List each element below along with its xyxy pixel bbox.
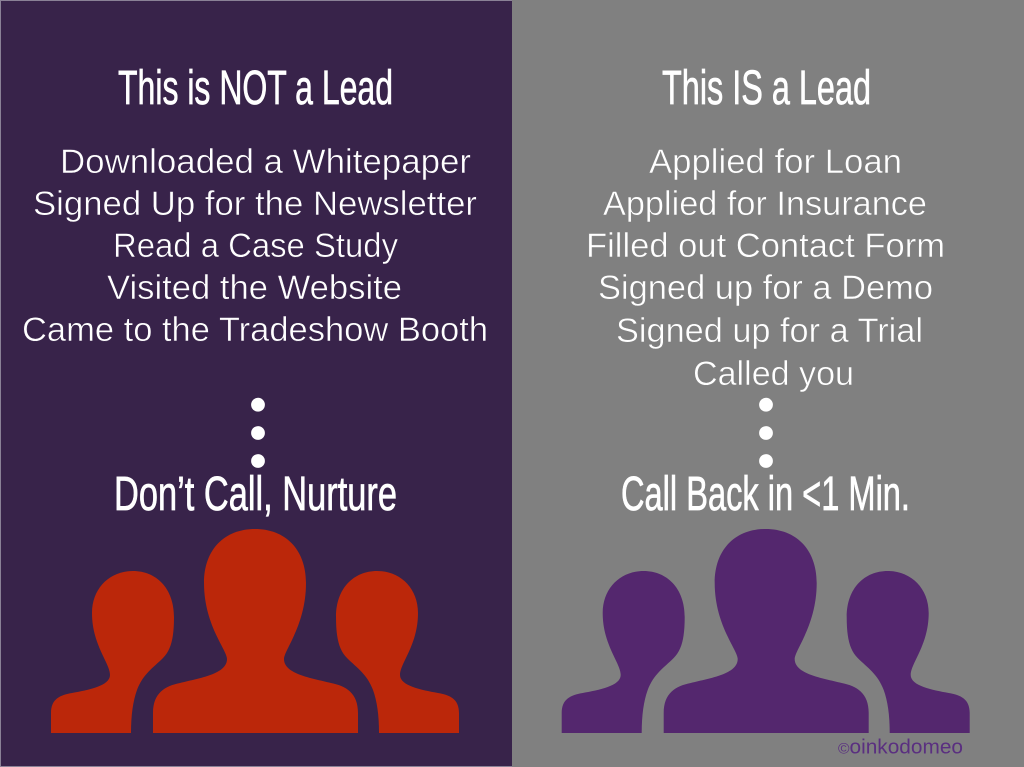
list: lead actions: Signed up for a Trial	[616, 312, 923, 350]
heading: This IS a Lead: This IS a Lead	[662, 62, 871, 115]
icon: orange people group	[51, 529, 459, 733]
list: not a lead actions: Downloaded a Whitepaper	[60, 143, 471, 181]
dots: right connector	[759, 398, 773, 468]
list: lead actions: Filled out Contact Form	[586, 227, 945, 265]
list: lead actions: Applied for Insurance	[603, 185, 927, 223]
list: lead actions	[586, 143, 945, 393]
list: not a lead actions: Visited the Website	[107, 269, 402, 307]
dots: left connector	[251, 398, 265, 468]
list: not a lead actions: Signed Up for the Newsletter	[33, 185, 477, 223]
list: lead actions: Signed up for a Demo	[598, 269, 933, 307]
heading: This is NOT a Lead: This is NOT a Lead	[118, 62, 393, 115]
list: not a lead actions: Came to the Tradeshow Booth	[22, 311, 488, 349]
list: not a lead actions	[22, 143, 488, 349]
icon: purple people group	[562, 529, 970, 733]
credit: oinkodomeo: ©oinkodomeo	[838, 736, 963, 758]
list: not a lead actions: Read a Case Study	[113, 227, 398, 265]
panel: not a lead	[1, 1, 512, 766]
heading: Don't Call, Nurture: Don’t Call, Nurture	[114, 468, 397, 521]
list: lead actions: Called you	[693, 355, 854, 393]
list: lead actions: Applied for Loan	[649, 143, 902, 181]
panel: is a lead	[562, 62, 970, 758]
